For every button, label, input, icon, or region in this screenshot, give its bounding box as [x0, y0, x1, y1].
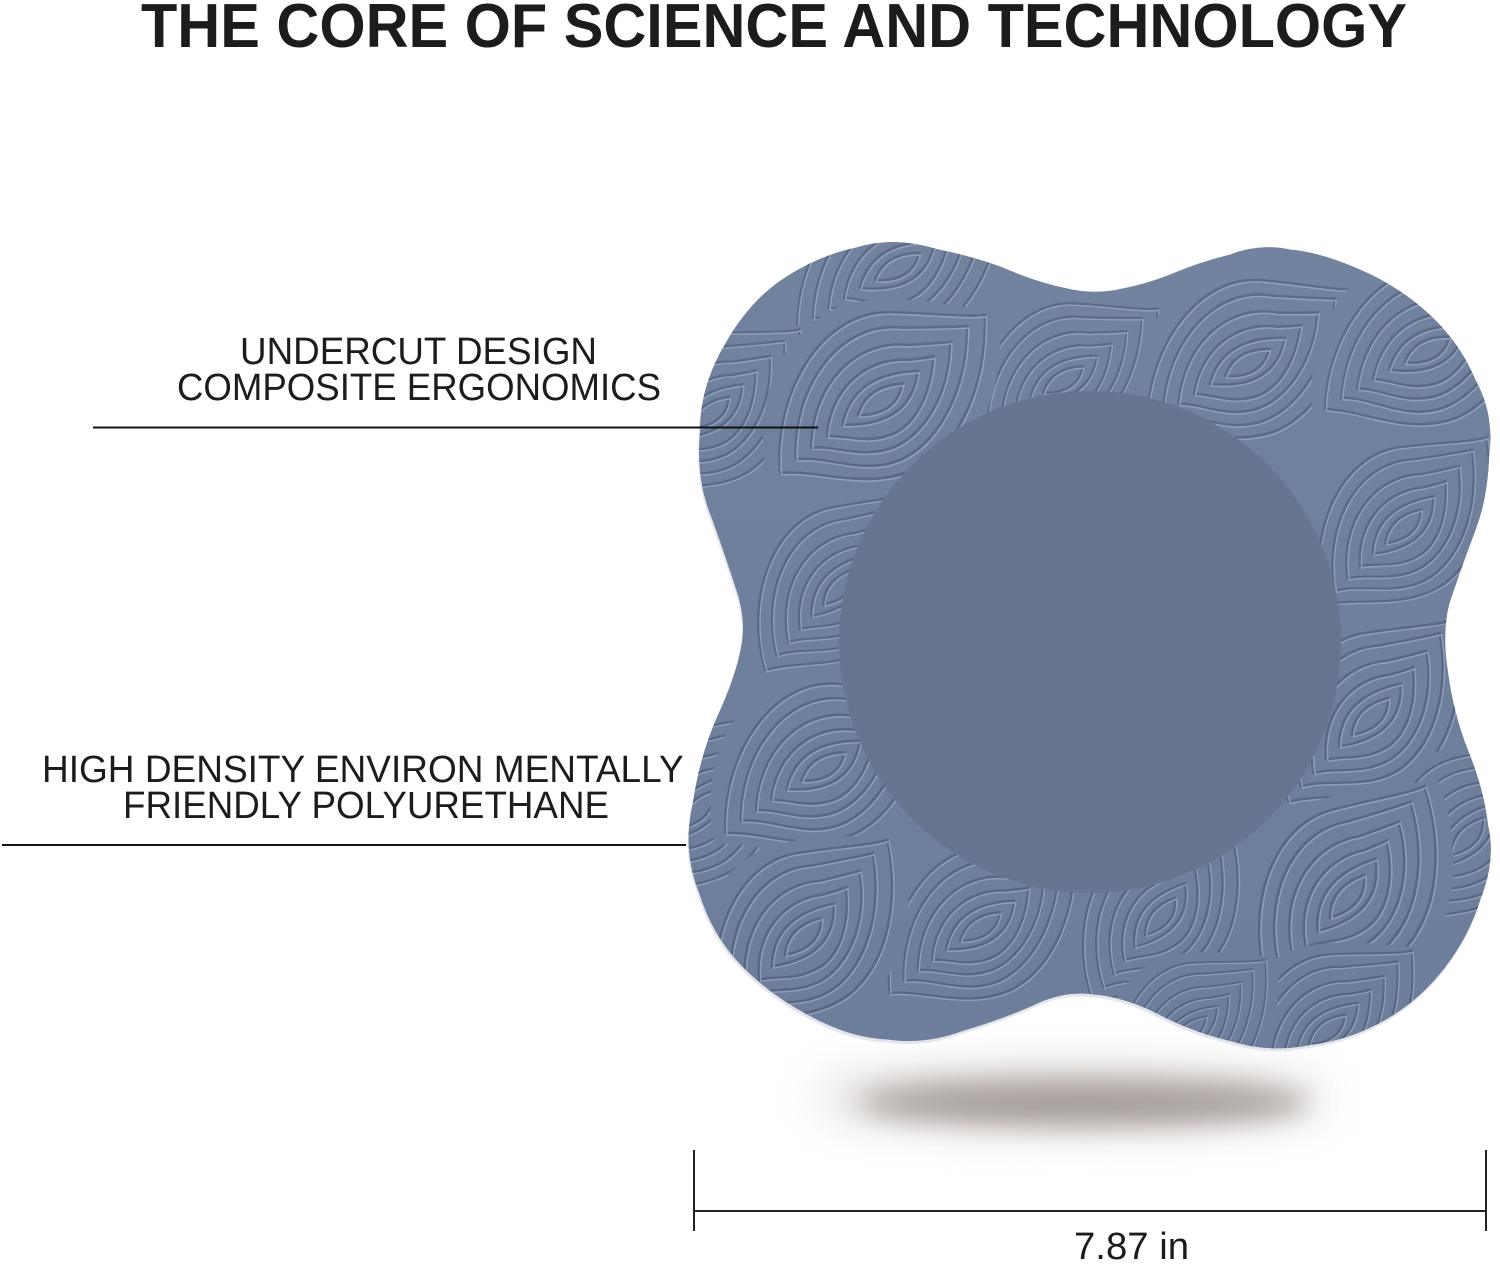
callout text: UNDERCUT DESIGN	[240, 331, 597, 373]
shadow beneath pad	[820, 1072, 1320, 1124]
dimension label: 7.87 in	[1074, 1226, 1189, 1267]
pad side edge	[688, 245, 1490, 1051]
callout: undercut design	[93, 331, 818, 428]
leader line	[2, 844, 686, 846]
leader line	[93, 426, 818, 428]
soft top lighting	[689, 242, 1491, 1048]
callout text: COMPOSITE ERGONOMICS	[177, 367, 661, 409]
pad top surface	[689, 242, 1491, 1048]
dimension bracket	[694, 1150, 1486, 1231]
callout text: HIGH DENSITY ENVIRON MENTALLY	[42, 749, 683, 791]
flat centre circle	[839, 391, 1341, 893]
yoga knee pad	[688, 242, 1491, 1052]
callout: polyurethane material	[2, 749, 694, 845]
width dimension	[694, 1150, 1486, 1267]
callout text: FRIENDLY POLYURETHANE	[123, 785, 609, 827]
embossed wave texture	[688, 242, 1491, 1048]
